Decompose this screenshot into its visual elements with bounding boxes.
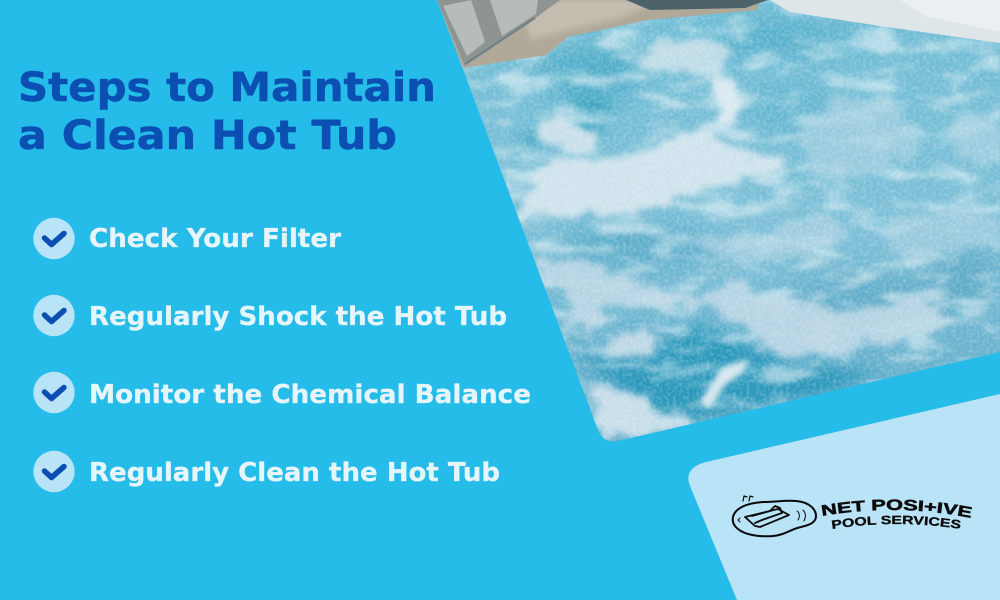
wordmark [822,499,972,529]
wordmark: NET POSI+IVE [822,499,972,518]
title [18,65,436,159]
title: a Clean Hot Tub [18,113,397,159]
item: check your filter [33,218,341,259]
item: regularly clean: Regularly Clean the Hot Tub [89,458,500,488]
title: Steps to Maintain [18,65,436,111]
hot tub rim [437,0,1000,68]
photo: hot tub water [430,0,1000,450]
item: check your filter: Check Your Filter [89,224,341,254]
logo: Net Positive Pool Services [732,495,972,538]
item: regularly shock: Regularly Shock the Hot Tub [89,302,507,332]
item: regularly clean [33,451,500,492]
item: monitor chemical balance [33,372,531,413]
panel: logo background [688,394,1000,600]
foam streaks [430,0,1000,450]
item: regularly shock [33,295,507,336]
checklist [33,218,531,492]
item: monitor chemical balance: Monitor the Chemical Balance [89,380,531,410]
icon: pool with lounger [733,496,816,536]
wordmark: POOL SERVICES [832,516,961,529]
